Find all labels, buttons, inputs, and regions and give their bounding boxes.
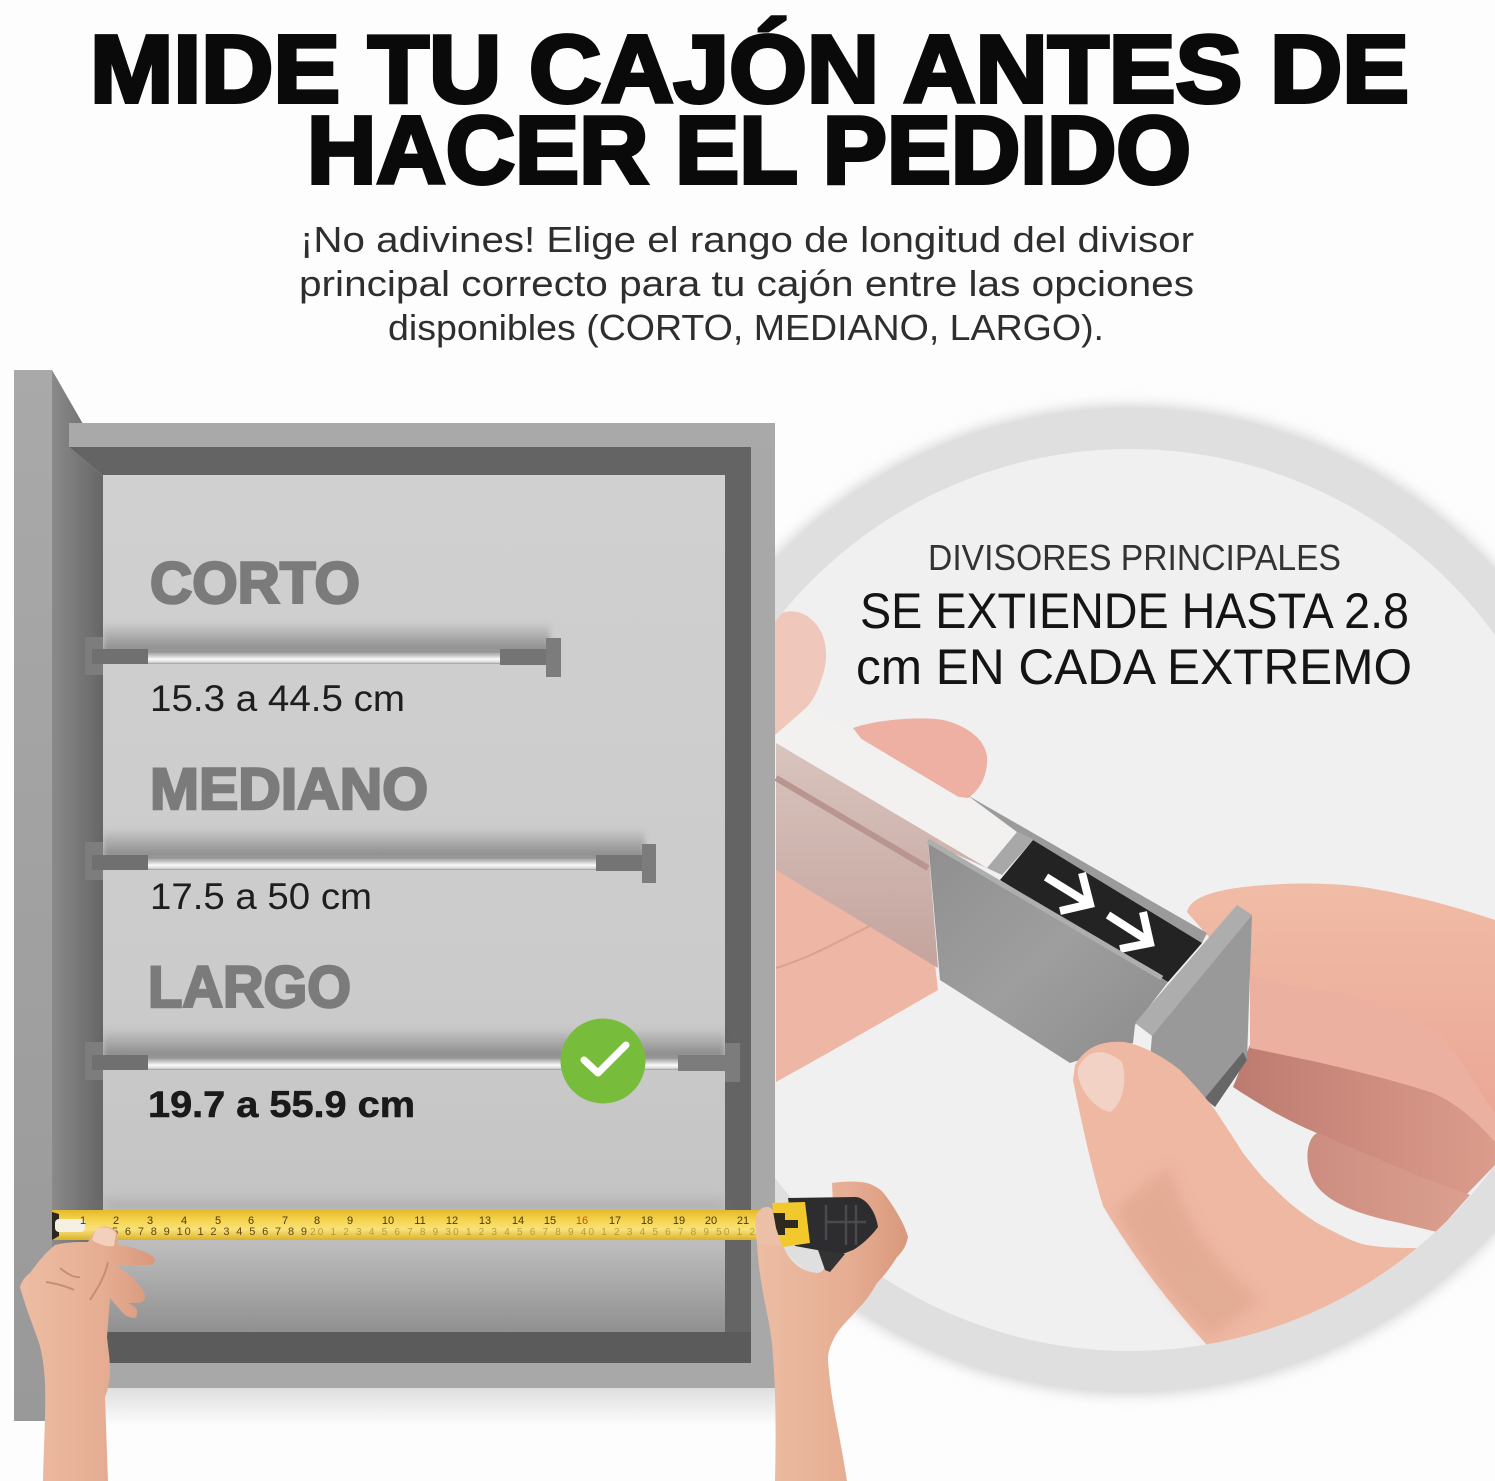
lower palm	[776, 860, 938, 1082]
index finger	[853, 718, 987, 798]
tape numbers upper: 17	[609, 1215, 621, 1227]
finger four	[1307, 1133, 1470, 1232]
heading corto: CORTO	[150, 551, 360, 616]
tape numbers upper: 8	[314, 1215, 320, 1227]
arrows	[1046, 873, 1150, 949]
tape blade	[52, 1210, 768, 1240]
tape numbers upper: 18	[641, 1215, 653, 1227]
right hand	[756, 1182, 908, 1481]
detail heading	[856, 583, 1412, 695]
heading mediano: MEDIANO	[150, 757, 428, 822]
finger two	[1250, 975, 1495, 1142]
detail heading: cm EN CADA EXTREMO	[856, 639, 1412, 695]
dark inner right	[725, 475, 751, 1363]
range mediano: 17.5 a 50 cm	[150, 876, 372, 917]
left hand	[20, 1226, 155, 1481]
palm crease	[776, 925, 872, 968]
tape numbers upper: 12	[446, 1215, 458, 1227]
tape belt clip	[818, 1250, 845, 1272]
silver bar top	[861, 738, 958, 797]
tape numbers upper: 1	[80, 1215, 86, 1227]
tape numbers upper: 19	[673, 1215, 685, 1227]
size: largo	[85, 955, 740, 1125]
end plate face	[1150, 915, 1252, 1107]
tape numbers upper: 16	[576, 1215, 588, 1227]
icon: green check	[560, 1018, 646, 1104]
end plate dark foot	[1205, 1052, 1247, 1107]
tape numbers upper: 13	[479, 1215, 491, 1227]
bar groove	[776, 778, 928, 868]
tape hook plate	[55, 1219, 85, 1232]
finger one	[1187, 884, 1495, 1113]
tape numbers upper: 7	[282, 1215, 288, 1227]
tape numbers upper: 21	[737, 1215, 749, 1227]
finger three	[1233, 1040, 1495, 1194]
dark inner bottom	[103, 1332, 751, 1363]
upper fingertip	[775, 611, 826, 735]
silver bar side	[776, 743, 987, 968]
tape numbers upper: 20	[705, 1215, 717, 1227]
dark inner top	[69, 447, 751, 476]
drawer frame top	[69, 423, 775, 447]
detail label: DIVISORES PRINCIPALES	[928, 537, 1341, 578]
end plate edge	[1135, 905, 1252, 1036]
drawer	[14, 370, 780, 1426]
size: mediano	[85, 757, 656, 917]
divider tab	[987, 832, 1033, 875]
tape numbers upper: 9	[347, 1215, 353, 1227]
title: HACER EL PEDIDO	[307, 97, 1191, 204]
rod corto	[85, 622, 561, 677]
photo: hands holding divider	[775, 611, 1495, 1345]
rod largo	[85, 1028, 740, 1082]
tape numbers upper: 15	[544, 1215, 556, 1227]
tape numbers lower right: 20 1 2 3 4 5 6 7 8 9 30 1 2 3 4 5 6 7 8 9 40 1 2 3 4 5 6 7 8 9 50 1 2	[310, 1227, 755, 1238]
intro text: ¡No adivines! Elige el rango de longitud del divisor	[300, 219, 1194, 260]
size: corto	[85, 551, 561, 719]
left hand creases	[46, 1262, 108, 1300]
tape body black	[788, 1197, 878, 1255]
left thumbnail	[92, 1227, 116, 1246]
tape hook	[52, 1212, 59, 1240]
range largo: 19.7 a 55.9 cm	[148, 1084, 415, 1125]
heading largo: LARGO	[148, 955, 351, 1020]
tape numbers upper: 3	[147, 1215, 153, 1227]
divider front plate	[928, 840, 1168, 1063]
tape numbers upper: 6	[248, 1215, 254, 1227]
range corto: 15.3 a 44.5 cm	[150, 678, 405, 719]
drawer drop shadow	[100, 1388, 780, 1426]
circle soft shadow	[636, 406, 1495, 1394]
intro text: principal correcto para tu cajón entre las opciones	[299, 263, 1194, 304]
right thumb tip	[756, 1207, 782, 1246]
intro text: disponibles (CORTO, MEDIANO, LARGO).	[388, 307, 1104, 348]
intro text	[299, 219, 1194, 348]
divider channel	[1000, 840, 1202, 982]
tape body ribs	[826, 1205, 866, 1245]
title: MIDE TU CAJÓN ANTES DE	[90, 16, 1409, 123]
rod mediano	[85, 828, 656, 883]
detail heading: SE EXTIENDE HASTA 2.8	[860, 583, 1409, 639]
thumb crease shade	[1120, 1174, 1254, 1334]
tape numbers upper: 14	[512, 1215, 524, 1227]
plate rim	[928, 841, 1162, 978]
thumbnail	[1078, 1052, 1124, 1112]
thumb	[1073, 1042, 1420, 1345]
tape shadow	[103, 1200, 725, 1212]
circle inner photo background	[679, 449, 1495, 1351]
tape numbers upper: 4	[181, 1215, 187, 1227]
left outer wall	[14, 370, 52, 1421]
drawer floor	[103, 475, 725, 1332]
tape body yellow	[772, 1202, 810, 1247]
tape numbers lower left: 5 6 7 8 9 10 1 2 3 4 5 6 7 8 9	[112, 1226, 307, 1238]
tape numbers upper	[80, 1215, 749, 1227]
drawer frame bottom	[52, 1363, 775, 1388]
tape measure	[20, 1182, 908, 1481]
title	[90, 16, 1409, 204]
tape numbers upper: 5	[215, 1215, 221, 1227]
divider top rail	[967, 795, 1207, 943]
drawer frame right	[751, 423, 775, 1388]
tape lock	[773, 1213, 798, 1235]
tape numbers upper: 10	[382, 1215, 394, 1227]
tape numbers upper: 11	[414, 1215, 426, 1227]
tape numbers upper: 2	[113, 1215, 119, 1227]
circle ring	[638, 408, 1495, 1392]
circular detail panel	[775, 400, 1495, 1400]
left inner wall	[52, 370, 103, 1364]
